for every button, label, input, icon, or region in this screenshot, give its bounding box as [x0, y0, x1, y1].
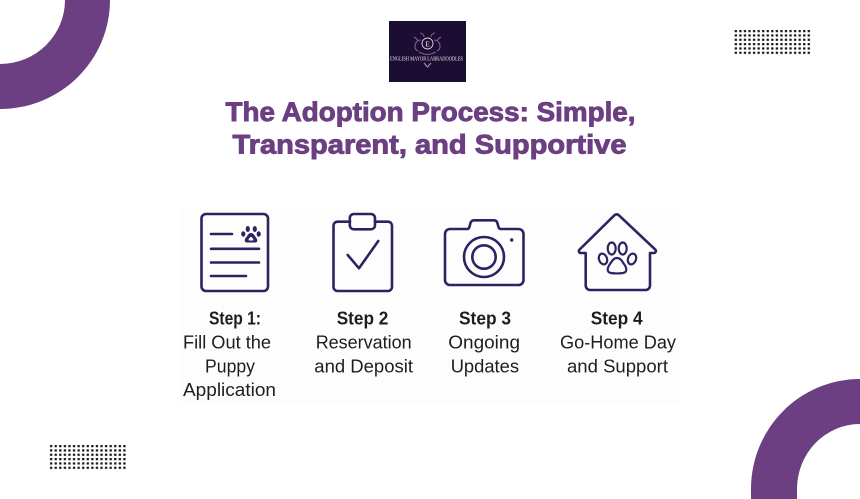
title: [226, 97, 636, 160]
title: The Adoption Process: Simple,: [226, 97, 636, 127]
step 3 label: Step 3: [459, 308, 511, 329]
step 3 label: Ongoing: [448, 332, 520, 353]
step 1 label: Step 1:: [209, 308, 261, 329]
step 3 label: Updates: [451, 356, 519, 376]
title: Transparent, and Supportive: [232, 130, 626, 160]
step 1 label: [183, 308, 276, 400]
logo: [389, 21, 466, 82]
step 2 label: and Deposit: [314, 356, 413, 376]
logo crest: [414, 33, 441, 67]
step 2 label: Step 2: [337, 308, 388, 329]
step 4 label: Step 4: [591, 308, 643, 329]
step 4 label: [560, 308, 677, 376]
icon: house with paw: [579, 214, 656, 290]
step 2 label: [314, 308, 413, 376]
step 4 label: Go-Home Day: [560, 332, 677, 353]
step 1 label: Application: [183, 379, 276, 400]
logo wordmark: ENGLISH MAYOR LABRADOODLES: [390, 56, 463, 62]
step 2 label: Reservation: [316, 332, 412, 353]
icon: application form with paw: [202, 214, 268, 291]
dot grid: bottom left: [49, 444, 127, 470]
panel: adoption steps: [180, 208, 680, 403]
step 3 label: [448, 308, 520, 376]
step 4 label: and Support: [567, 356, 668, 376]
step 1 label: Fill Out the: [183, 332, 271, 353]
decorative arc: bottom right: [751, 379, 860, 499]
dot grid: top right: [734, 29, 811, 55]
logo monogram: E: [425, 40, 430, 48]
icon: camera: [445, 220, 524, 285]
step 1 label: Puppy: [205, 356, 256, 376]
icon: clipboard with check: [334, 214, 392, 291]
decorative arc: top left: [0, 0, 110, 109]
